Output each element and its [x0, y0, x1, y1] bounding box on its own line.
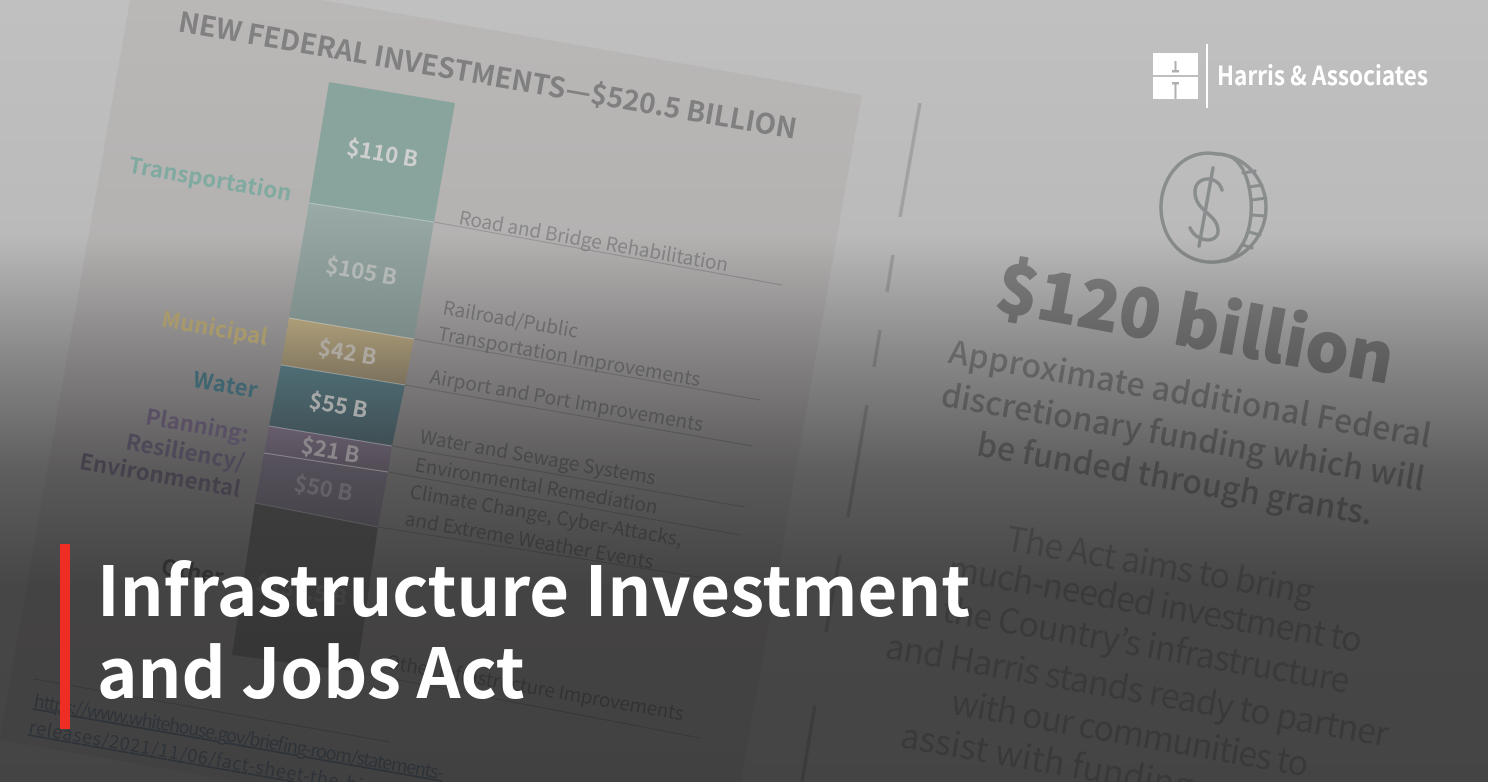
callout: other infrastructure: Other Infrastructure Improvements: [384, 647, 686, 726]
title: Infrastructure Investment: [97, 536, 970, 636]
label: water: Water: [191, 362, 261, 405]
bar values: [253, 130, 421, 613]
segment: railroad and transit: [289, 203, 434, 339]
panel: document page: [0, 0, 862, 782]
callout: climate: Climate Change, Cyber-Attacks,: [408, 477, 684, 552]
text block: the act aims: The Act aims to bring: [1003, 512, 1318, 614]
callout: environmental: Environmental Remediation: [413, 450, 660, 520]
segment: water: [269, 365, 405, 446]
label: resiliency: Resiliency/: [124, 425, 247, 477]
callout: transportation improvements: Transportation Improvements: [436, 319, 703, 392]
label: planning: Planning:: [143, 399, 251, 449]
category labels: [77, 148, 294, 592]
logo wordmark: Harris & Associates: [1217, 56, 1428, 93]
label: municipal: Municipal: [159, 302, 270, 352]
callout: water: Water and Sewage Systems: [418, 422, 658, 490]
segment: remediation: [264, 426, 392, 472]
value: $21 B: $21 B: [299, 428, 362, 470]
callout labels: [384, 203, 730, 726]
text block: the act aims: much-needed investment to: [944, 541, 1367, 662]
label: transportation: Transportation: [126, 148, 294, 208]
value: $105 B: $105 B: [323, 248, 400, 292]
bar callout lines: [34, 222, 782, 742]
value: other: $137.5 B: [253, 565, 350, 613]
text block: discretionary funding: [938, 327, 1435, 535]
headline: $120 billion: $120 billion: [990, 233, 1403, 403]
callout: airport: Airport and Port Improvements: [428, 362, 706, 437]
value: $55 B: $55 B: [307, 383, 370, 425]
segment: other: [232, 503, 378, 672]
segment dividers: [255, 203, 434, 527]
title: and Jobs Act: [97, 618, 525, 718]
callout: extreme weather: and Extreme Weather Events: [403, 504, 656, 575]
callout: railroad: Railroad/Public: [441, 293, 581, 344]
dashed divider: [802, 103, 920, 782]
text block: the act aims: [882, 512, 1394, 782]
value: $50 B: $50 B: [292, 466, 355, 508]
heading: new federal investments: NEW FEDERAL INVESTMENTS—$520.5 BILLION: [176, 1, 800, 148]
text block: discretionary funding: discretionary funding which will: [938, 370, 1429, 500]
logo: Harris and Associates: [1153, 44, 1428, 108]
value: $42 B: $42 B: [316, 330, 379, 372]
stacked bar chart: [232, 82, 455, 672]
segment: airport and port: [281, 318, 414, 385]
callout: road and bridge: Road and Bridge Rehabilitation: [457, 203, 730, 277]
title: [97, 536, 970, 718]
label: environmental: Environmental: [77, 444, 243, 504]
segment: road and bridge: [309, 82, 455, 222]
text block: the act aims: the Country’s infrastructure: [939, 583, 1354, 703]
logo divider: [1206, 44, 1208, 108]
logo mark: [1153, 53, 1198, 99]
accent bar: [60, 544, 70, 729]
label: other: Other: [159, 549, 227, 592]
value: $110 B: $110 B: [344, 130, 421, 174]
text block: discretionary funding: Approximate additional Federal: [945, 327, 1435, 457]
icon: dollar coin: [1161, 153, 1266, 262]
text block: discretionary funding: be funded through grants.: [974, 420, 1377, 535]
text block: the act aims: and Harris stands ready to partner: [882, 619, 1394, 756]
segment: climate: [255, 453, 388, 527]
